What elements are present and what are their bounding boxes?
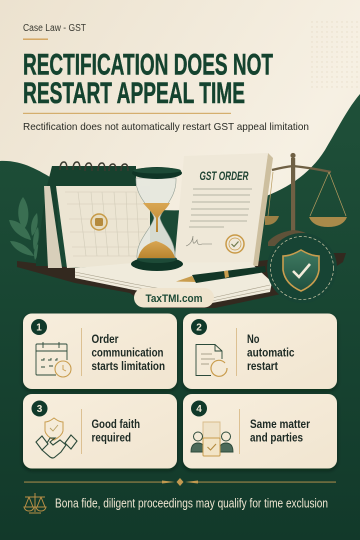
document lines	[189, 189, 252, 227]
icon: calendar clock	[36, 342, 71, 377]
panel: card 1	[23, 314, 177, 389]
card 1 text: communication	[92, 348, 164, 360]
card 2 text: No	[247, 334, 260, 346]
title rule	[23, 113, 231, 114]
card 2 text: automatic	[247, 348, 295, 360]
number badge 2: 2	[196, 322, 202, 334]
ornamental divider	[24, 478, 336, 486]
card 4 text: Same matter	[250, 419, 310, 431]
number badge 3: 3	[37, 404, 43, 415]
badge: shield	[267, 233, 337, 303]
book pages	[75, 262, 272, 303]
card 2 text	[247, 334, 295, 373]
card 4 text	[250, 419, 310, 444]
card 3 text: Good faith	[92, 419, 140, 431]
divider	[80, 409, 83, 454]
fountain pen	[176, 266, 266, 283]
panel: card 4	[183, 394, 337, 468]
desk board	[17, 253, 346, 308]
icon: footer scales	[24, 493, 46, 513]
kicker rule	[23, 38, 48, 40]
brand pill	[134, 288, 214, 308]
icon: shield handshake	[36, 418, 77, 458]
icon: document restart	[196, 344, 227, 376]
calendar	[36, 162, 150, 268]
number badge 1	[31, 319, 47, 335]
card 3 text: required	[92, 432, 131, 444]
divider	[80, 328, 83, 376]
icon: parties and clipboards	[191, 422, 233, 456]
hero illustration	[9, 153, 347, 308]
card 3 text	[92, 419, 140, 444]
number badge 2	[191, 319, 207, 335]
panel: card 2	[183, 314, 337, 389]
panel: card 3	[23, 394, 177, 468]
number badge 4: 4	[196, 404, 202, 415]
card 1 text: Order	[92, 334, 119, 346]
signature	[186, 236, 212, 246]
highlighted date	[91, 214, 107, 230]
document heading: GST ORDER	[200, 171, 249, 183]
card 2 text: restart	[247, 361, 278, 373]
title	[23, 48, 273, 110]
card 1 text	[92, 334, 165, 373]
number badge 4	[191, 400, 207, 416]
divider	[238, 409, 241, 454]
scales of justice	[265, 153, 347, 246]
dot texture	[310, 20, 360, 90]
divider	[235, 328, 238, 376]
order document	[174, 153, 273, 266]
number badge 1: 1	[36, 322, 42, 334]
number badge 3	[32, 400, 48, 416]
kicker: Case Law - GST	[23, 23, 86, 34]
subtitle: Rectification does not automatically restart GST appeal limitation	[23, 121, 309, 133]
calendar rings	[60, 162, 128, 171]
seal	[226, 235, 244, 253]
icon: leaves	[9, 197, 39, 260]
brand pill: TaxTMI.com	[146, 293, 203, 305]
hourglass	[131, 167, 183, 271]
card 1 text: starts limitation	[92, 361, 165, 373]
card 4 text: and parties	[250, 432, 303, 444]
